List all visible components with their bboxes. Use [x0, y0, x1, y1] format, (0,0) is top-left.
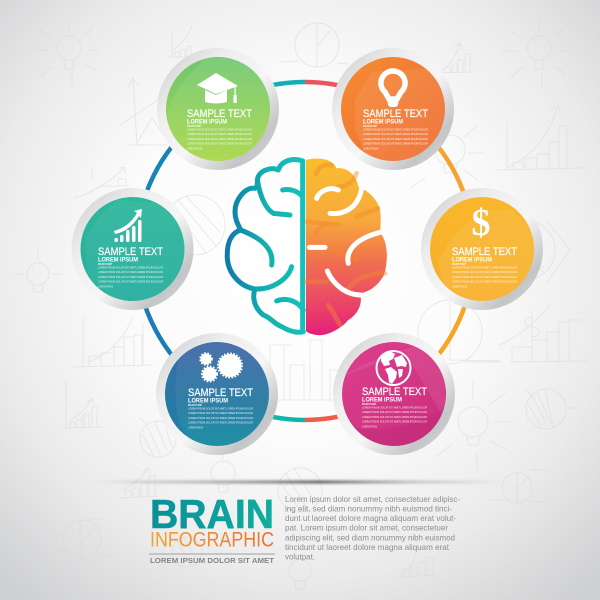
- text: blue panel: LOREM IPSUM: [188, 425, 203, 429]
- text: blue panel: DOLOR SIT AMET: [188, 403, 202, 407]
- text: orange panel: SAMPLE TEXT: [363, 108, 428, 120]
- text: teal panel: SAMPLE TEXT: [98, 246, 163, 258]
- text: yellow panel: [452, 246, 518, 288]
- text: orange panel: [363, 108, 429, 150]
- brain: left outlined hemisphere: [227, 160, 303, 332]
- brain: right coloured hemisphere: [306, 158, 387, 335]
- text: blue panel: LOREM IPSUM: [188, 398, 228, 404]
- body paragraph: [285, 494, 460, 562]
- ring segment: bottom red: [305, 411, 360, 420]
- text: green panel: LOREM IPSUM: [187, 118, 227, 126]
- ring segment: lower right orange: [400, 251, 474, 391]
- text: blue panel: LOREM IPSUM DOLOR SIT AMETLOREM IPSUM DOLOR: [188, 416, 254, 420]
- text: blue panel: [188, 387, 254, 429]
- panel: green graduation: [157, 48, 280, 170]
- text: pink panel: LOREM IPSUM DOLOR SIT AMET LOREM IPSUM DOLOR: [362, 406, 428, 410]
- body paragraph: ing elit, sed diam nonummy nibh euismod tinci-: [285, 504, 452, 514]
- body paragraph: Lorem ipsum dolor sit amet, consectetuer adipisc-: [285, 494, 460, 504]
- text: green panel: LOREM IPSUM DOLOR SIT AMETLOREM IPSUM DOLOR: [187, 132, 253, 136]
- text: pink panel: SAMPLE TEXT: [362, 386, 427, 398]
- text: pink panel: LOREM IPSUM DOLOR SIT AMETLOREM IPSUM DOLOR: [362, 415, 428, 419]
- icon: globe: [376, 351, 410, 385]
- text: green panel: [187, 108, 253, 150]
- panel: pink globe: [333, 333, 455, 455]
- text: blue panel: LOREM IPSUM DOLOR SIT AMET LOREM IPSUM DOLOR: [188, 406, 254, 410]
- text: yellow panel: LOREM IPSUM DOLOR SIT AMETLOREM IPSUM DOLOR: [452, 270, 518, 274]
- text: pink panel: LOREM IPSUM DOLOR SIT AMETLOREM IPSUM DOLOR: [362, 420, 428, 424]
- icon: growth chart: [114, 209, 142, 242]
- text: orange panel: LOREM IPSUM: [363, 118, 403, 126]
- text: teal panel: LOREM IPSUM: [98, 256, 138, 264]
- text: orange panel: LOREM IPSUM DOLOR SIT AMETLOREM IPSUM DOLOR: [363, 137, 429, 141]
- text: pink panel: [362, 386, 428, 428]
- text: teal panel: [98, 246, 164, 288]
- panel: blue gears: [156, 333, 278, 455]
- text: yellow panel: DOLOR SIT AMET: [452, 262, 466, 266]
- body paragraph: tincidunt ut laoreet dolore magna aliquam erat: [285, 542, 450, 552]
- icon: graduation cap: [197, 73, 238, 104]
- text: yellow panel: LOREM IPSUM: [452, 256, 492, 264]
- ring segment: upper right orange: [420, 127, 474, 251]
- icon: gears: [200, 354, 242, 381]
- text: blue panel: LOREM IPSUM DOLOR SIT AMETLOREM IPSUM DOLOR: [188, 421, 254, 425]
- text: blue panel: SAMPLE TEXT: [188, 387, 253, 399]
- connecting ring: [136, 82, 474, 420]
- text: orange panel: DOLOR SIT AMET: [363, 124, 377, 128]
- text: blue panel: LOREM IPSUM DOLOR SIT AMETLOREM IPSUM DOLOR: [188, 411, 254, 415]
- text: teal panel: LOREM IPSUM DOLOR SIT AMETLOREM IPSUM DOLOR: [98, 275, 164, 279]
- text: yellow panel: LOREM IPSUM DOLOR SIT AMETLOREM IPSUM DOLOR: [452, 275, 518, 279]
- text: teal panel: LOREM IPSUM DOLOR SIT AMETLOREM IPSUM DOLOR: [98, 280, 164, 284]
- text: pink panel: LOREM IPSUM: [362, 396, 402, 404]
- text: teal panel: LOREM IPSUM DOLOR SIT AMET LOREM IPSUM DOLOR: [98, 266, 164, 270]
- text: yellow panel: SAMPLE TEXT: [452, 246, 517, 258]
- text: teal panel: LOREM IPSUM: [98, 284, 113, 288]
- text: green panel: LOREM IPSUM DOLOR SIT AMETLOREM IPSUM DOLOR: [187, 142, 253, 146]
- tagline: LOREM IPSUM DOLOR SIT AMET: [150, 556, 274, 565]
- ring segment: bottom teal: [250, 411, 305, 420]
- text: pink panel: LOREM IPSUM: [362, 424, 377, 428]
- text: green panel: SAMPLE TEXT: [187, 108, 252, 120]
- text: orange panel: LOREM IPSUM DOLOR SIT AMETLOREM IPSUM DOLOR: [363, 132, 429, 136]
- title block: [149, 491, 275, 565]
- icon: dollar sign: $: [472, 202, 490, 244]
- text: yellow panel: LOREM IPSUM DOLOR SIT AMET LOREM IPSUM DOLOR: [452, 266, 518, 270]
- body paragraph: pat. Lorem ipsum dolor sit amet, consectetuer: [285, 523, 448, 533]
- body paragraph: adipiscing elit, sed diam nonummy nibh euismod: [285, 532, 455, 542]
- brain illustration: [227, 158, 387, 335]
- ring segment: upper left blue: [136, 127, 190, 251]
- text: orange panel: LOREM IPSUM DOLOR SIT AMET LOREM IPSUM DOLOR: [363, 128, 429, 132]
- text: orange panel: LOREM IPSUM: [363, 146, 378, 150]
- subtitle: INFOGRAPHIC: INFOGRAPHIC: [150, 528, 274, 552]
- horizontal shadow divider: [95, 480, 505, 484]
- text: green panel: LOREM IPSUM: [187, 146, 202, 150]
- body paragraph: volutpat.: [285, 552, 315, 562]
- text: green panel: LOREM IPSUM DOLOR SIT AMETLOREM IPSUM DOLOR: [187, 137, 253, 141]
- rule under title: [149, 554, 275, 555]
- ring segment: lower left blue: [136, 251, 210, 391]
- panel: teal chart: [72, 188, 194, 310]
- text: teal panel: DOLOR SIT AMET: [98, 262, 112, 266]
- text: pink panel: LOREM IPSUM DOLOR SIT AMETLOREM IPSUM DOLOR: [362, 410, 428, 414]
- text: green panel: DOLOR SIT AMET: [187, 124, 201, 128]
- text: yellow panel: LOREM IPSUM DOLOR SIT AMETLOREM IPSUM DOLOR: [452, 280, 518, 284]
- text: teal panel: LOREM IPSUM DOLOR SIT AMETLOREM IPSUM DOLOR: [98, 270, 164, 274]
- icon: light bulb: [381, 71, 405, 107]
- text: orange panel: LOREM IPSUM DOLOR SIT AMETLOREM IPSUM DOLOR: [363, 142, 429, 146]
- text: green panel: LOREM IPSUM DOLOR SIT AMET LOREM IPSUM DOLOR: [187, 128, 253, 132]
- title: BRAIN: BRAIN: [150, 491, 274, 537]
- text: yellow panel: LOREM IPSUM: [452, 284, 467, 288]
- panel: yellow dollar: [421, 188, 543, 310]
- body paragraph: dunt ut laoreet dolore magna aliquam erat volut-: [285, 513, 456, 523]
- ring segment: top red: [305, 82, 355, 90]
- text: pink panel: DOLOR SIT AMET: [362, 402, 376, 406]
- ring segment: top teal: [250, 82, 305, 91]
- panel: orange bulb: [332, 48, 454, 170]
